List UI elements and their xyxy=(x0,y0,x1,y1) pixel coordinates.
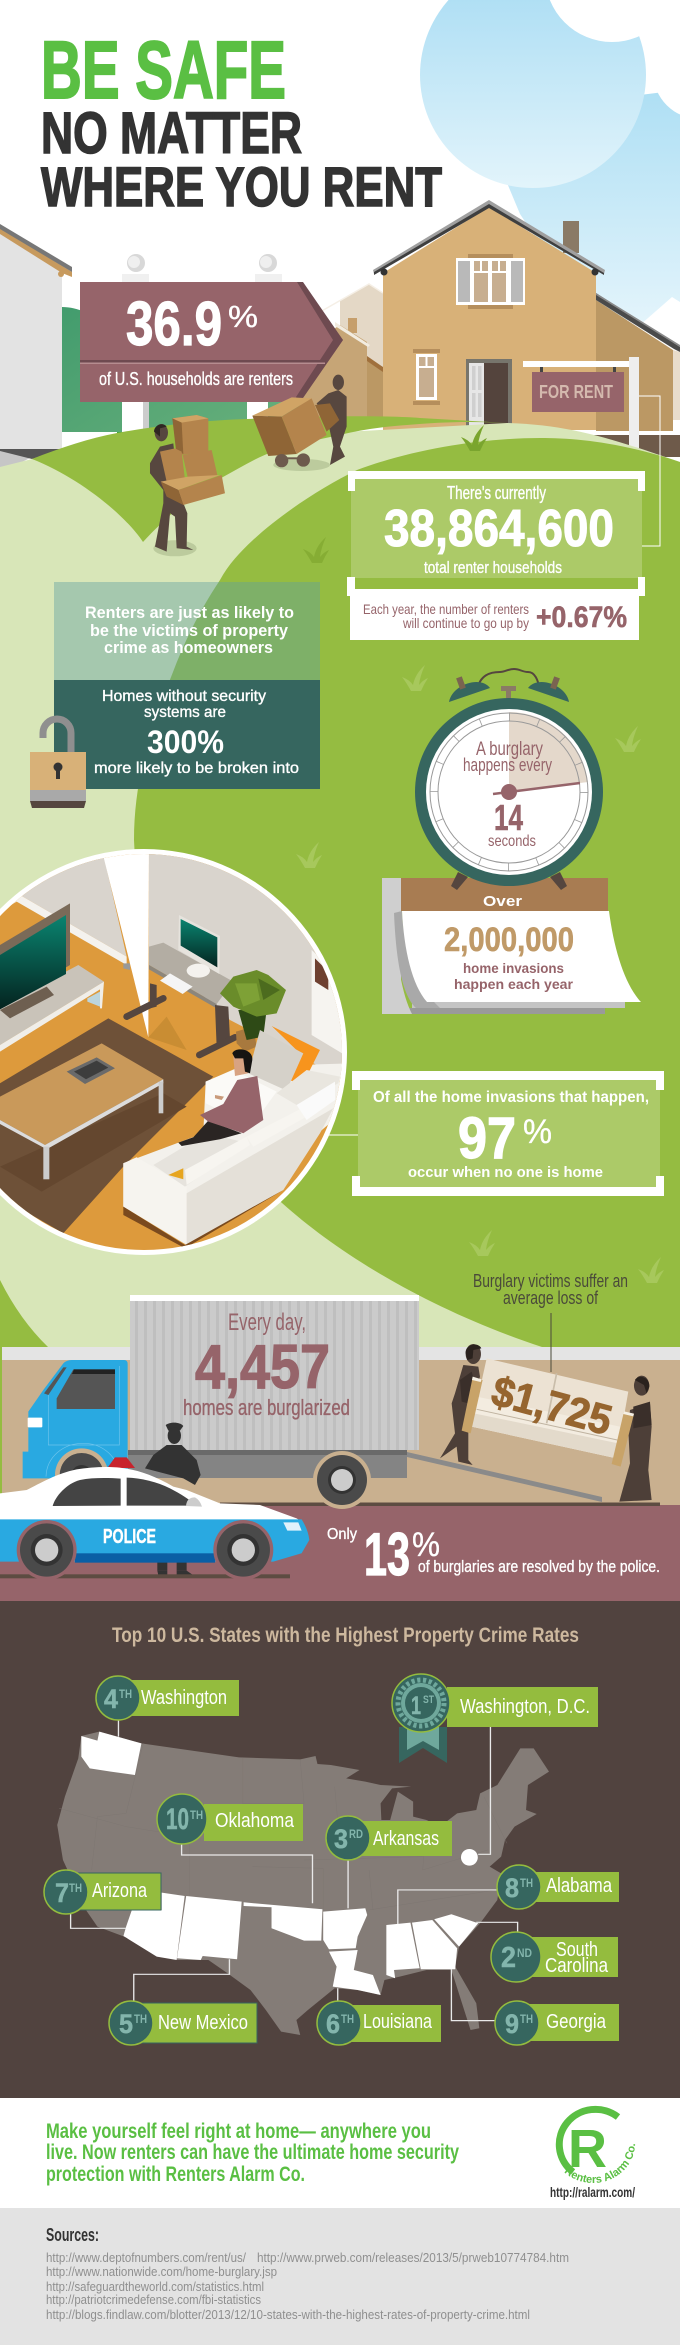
label: 2nd South Carolina xyxy=(491,1932,618,1982)
panel: sources: http://www.nationwide.com/home-burglary.jsp xyxy=(46,2264,277,2279)
left neighbouring house xyxy=(0,224,72,450)
label: 1st Washington D.C. with ribbon: 1 xyxy=(411,1692,421,1720)
label: 9th Georgia: Georgia xyxy=(546,2011,607,2033)
calendar page: home invasions xyxy=(463,960,564,976)
panel: sources: Sources: xyxy=(46,2225,99,2245)
panel: sources: http://www.deptofnumbers.com/rent/us/ xyxy=(46,2250,246,2265)
panel: victims of property crime: crime as homeowners xyxy=(104,638,273,657)
alarm clock xyxy=(415,669,603,890)
right house wing xyxy=(540,293,680,457)
label: 10th Oklahoma: 10 xyxy=(166,1803,189,1836)
closing message xyxy=(46,2120,459,2186)
connector lines xyxy=(71,1720,518,2021)
seated person xyxy=(178,1049,263,1146)
panel: sources: http://blogs.findlaw.com/blotter/2013/12/10-states-with-the-highest-rates-of-property-crime.html xyxy=(46,2307,530,2322)
label: 8th Alabama: Alabama xyxy=(546,1875,613,1897)
stat: 13% resolved: 13 xyxy=(364,1521,410,1588)
label: 4th Washington xyxy=(96,1676,239,1720)
label: 3rd Arkansas: Arkansas xyxy=(373,1828,439,1850)
police officer xyxy=(145,1423,201,1575)
label: 4th Washington: 4 xyxy=(104,1684,118,1714)
label: 3rd Arkansas: 3 xyxy=(334,1824,348,1854)
label: 7th Arizona: 7 xyxy=(55,1878,69,1908)
alarm clock: 14 xyxy=(494,797,523,838)
panel: homes without security: 300% xyxy=(147,724,224,760)
highlighted states xyxy=(81,1732,478,1995)
label: 1st Washington D.C. with ribbon xyxy=(392,1674,598,1763)
for rent sign xyxy=(523,357,639,448)
label: 8th Alabama: 8 xyxy=(505,1873,519,1903)
label: 5th New Mexico: TH xyxy=(134,2012,147,2026)
banner: 36.9% of households: 36.9 xyxy=(126,290,222,359)
logo: Renters Alarm Co.: http://ralarm.com/ xyxy=(550,2184,635,2200)
panel: sources: http://patriotcrimedefense.com/fbi-statistics xyxy=(46,2292,261,2307)
calendar page: Over xyxy=(483,893,522,910)
panel: homes without security: more likely to be broken into xyxy=(94,760,299,777)
US map xyxy=(57,1720,549,2035)
label: 5th New Mexico: 5 xyxy=(119,2009,133,2039)
label: 2nd South Carolina: 2 xyxy=(501,1942,516,1974)
label: 2nd South Carolina: Carolina xyxy=(545,1955,609,1977)
for rent sign: FOR RENT xyxy=(539,382,613,402)
label: 6th Louisiana: 6 xyxy=(326,2009,340,2039)
stat box: total renter households: There's currently xyxy=(447,483,546,503)
moving truck xyxy=(23,1295,602,1509)
clock bells and feet xyxy=(449,669,569,890)
logo: Renters Alarm Co. xyxy=(550,2106,636,2200)
panel: sources: http://www.prweb.com/releases/2013/5/prweb10774784.htm xyxy=(257,2250,569,2265)
callout: 97% when no one home: occur when no one is home xyxy=(408,1164,603,1181)
truck cab xyxy=(23,1360,128,1502)
stat box: total renter households: Each year, the number of renters xyxy=(363,601,529,617)
icon: open padlock xyxy=(30,719,86,808)
calendar page: 2,000,000 xyxy=(444,921,574,959)
label: 1st Washington D.C. with ribbon: ST xyxy=(423,1694,434,1706)
panel: sources xyxy=(0,2208,680,2345)
logo: Renters Alarm Co.: R xyxy=(568,2119,607,2179)
label: 9th Georgia: TH xyxy=(520,2012,533,2026)
label: 5th New Mexico: New Mexico xyxy=(158,2012,248,2034)
upper window xyxy=(456,254,525,309)
police car: POLICE xyxy=(103,1526,156,1548)
label: 4th Washington: Washington xyxy=(141,1687,227,1709)
truck text: 4,457 xyxy=(195,1333,330,1402)
truck text: homes are burglarized xyxy=(183,1395,350,1420)
label: 2nd South Carolina: South xyxy=(556,1939,598,1961)
loss caption: average loss of xyxy=(503,1288,599,1308)
window on wall xyxy=(312,950,342,1054)
label: 4th Washington: TH xyxy=(119,1687,132,1701)
lower window xyxy=(413,349,440,405)
label: 6th Louisiana xyxy=(317,2001,441,2045)
stat box: total renter households: will continue to go up by xyxy=(402,615,529,631)
panel: homes without security: systems are xyxy=(144,704,226,721)
label: 10th Oklahoma xyxy=(157,1794,303,1844)
callout: 97% when no one home: % xyxy=(523,1113,552,1151)
label: 8th Alabama xyxy=(497,1865,619,1909)
label: 3rd Arkansas: RD xyxy=(349,1827,363,1841)
stat box: total renter households xyxy=(347,396,660,640)
label: 8th Alabama: TH xyxy=(520,1876,533,1890)
callout: 97% when no one home: Of all the home invasions that happen, xyxy=(373,1089,649,1106)
grass tufts xyxy=(296,425,664,1283)
panel: homes without security: Homes without security xyxy=(102,688,266,705)
illustration: living room circle xyxy=(0,847,353,1267)
banner: 36.9% of households xyxy=(80,282,343,402)
calendar page xyxy=(382,878,641,1014)
label: 10th Oklahoma: TH xyxy=(190,1808,203,1822)
truck text: Every day, xyxy=(228,1309,306,1336)
ground xyxy=(0,416,680,1577)
label: 3rd Arkansas xyxy=(326,1816,452,1860)
title: BE SAFE xyxy=(41,25,286,116)
plant xyxy=(220,970,286,1052)
label: 9th Georgia: 9 xyxy=(505,2009,519,2039)
front door xyxy=(466,359,512,431)
sofa with pillows xyxy=(123,1026,353,1248)
gate pillars with lamps xyxy=(122,254,282,432)
mover with hand truck xyxy=(252,375,347,471)
panel: victims of property crime: be the victims of property xyxy=(90,621,289,640)
closing message: protection with Renters Alarm Co. xyxy=(46,2163,305,2186)
closing message: Make yourself feel right at home— anywhere you xyxy=(46,2120,431,2143)
label: 1st Washington D.C. with ribbon: Washington, D.C. xyxy=(460,1696,590,1718)
title: WHERE YOU RENT xyxy=(41,155,442,218)
alarm clock: seconds xyxy=(488,833,536,850)
stat box: total renter households: total renter households xyxy=(424,558,562,577)
coffee table xyxy=(0,1043,163,1179)
label: 6th Louisiana: TH xyxy=(341,2012,354,2026)
green house behind banner xyxy=(62,254,300,435)
stat box: total renter households: +0.67% xyxy=(536,601,627,634)
label: 9th Georgia xyxy=(495,2001,619,2045)
label: 5th New Mexico xyxy=(109,2001,257,2045)
desk and computer xyxy=(127,915,235,1055)
stat box: total renter households: 38,864,600 xyxy=(384,500,614,558)
banner: 36.9% of households: % xyxy=(228,299,258,334)
loss caption: Burglary victims suffer an xyxy=(473,1271,628,1291)
sky clouds xyxy=(420,0,680,345)
banner: 36.9% of households: of U.S. households are renters xyxy=(99,369,293,389)
map heading: Top 10 U.S. States with the Highest Property Crime Rates xyxy=(112,1624,579,1647)
background houses xyxy=(300,284,383,420)
stat: 13% resolved xyxy=(327,1521,660,1588)
truck text xyxy=(183,1309,350,1420)
label: 7th Arizona xyxy=(44,1870,161,1914)
label: 7th Arizona: TH xyxy=(69,1881,82,1895)
label: 10th Oklahoma: Oklahoma xyxy=(215,1810,295,1832)
TV and stand xyxy=(0,903,104,1052)
calendar page: happen each year xyxy=(454,976,574,992)
movers carrying sofa xyxy=(440,1344,652,1502)
title: NO MATTER xyxy=(41,101,302,166)
dollar amount $1,725: $1,725 xyxy=(487,1367,617,1444)
callout: 97% when no one home: 97 xyxy=(458,1106,516,1171)
logo: Renters Alarm Co.: Renters Alarm Co. xyxy=(564,2144,636,2183)
panel: map section xyxy=(0,1601,680,2098)
label: 2nd South Carolina: ND xyxy=(517,1946,532,1960)
stat: 13% resolved: Only xyxy=(327,1526,357,1543)
panel: sources: http://safeguardtheworld.com/statistics.html xyxy=(46,2279,264,2294)
main house xyxy=(373,200,605,431)
label: 7th Arizona: Arizona xyxy=(92,1880,148,1902)
street background xyxy=(0,1347,680,1601)
loss caption xyxy=(473,1271,628,1372)
police car xyxy=(0,1457,309,1580)
label: 6th Louisiana: Louisiana xyxy=(363,2011,433,2033)
callout: 97% when no one home xyxy=(328,1071,664,1196)
closing message: live. Now renters can have the ultimate home security xyxy=(46,2141,459,2164)
stat: 13% resolved: % xyxy=(412,1526,440,1564)
panel: victims of property crime xyxy=(54,582,320,680)
alarm clock: A burglary xyxy=(476,739,543,760)
panel: homes without security xyxy=(54,680,320,789)
title xyxy=(41,25,442,218)
alarm clock: happens every xyxy=(463,755,552,775)
mover carrying boxes xyxy=(150,415,225,556)
panel: victims of property crime: Renters are just as likely to xyxy=(85,603,294,622)
